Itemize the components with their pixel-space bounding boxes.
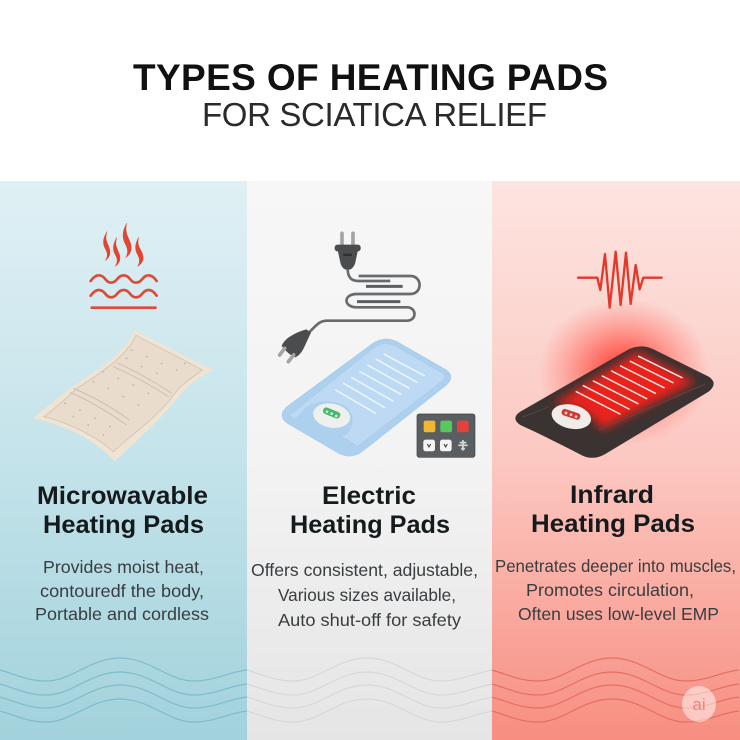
- icon: electric cord and plugs: [280, 233, 420, 362]
- heading: infrared: Heating Pads: [531, 510, 695, 538]
- icon: infrared pad: [515, 346, 714, 458]
- heading: electric: Heating Pads: [290, 511, 450, 539]
- icon: infrared wave: [578, 252, 662, 308]
- text: infrared benefits: [495, 556, 736, 624]
- waves: microwavable: [0, 658, 247, 722]
- icon: infrared glow: [538, 298, 710, 446]
- title: [133, 57, 608, 133]
- panel: electric: [247, 181, 492, 740]
- text: microwavable benefits: Portable and cordless: [35, 604, 209, 624]
- icon: microwavable pad: [33, 330, 214, 462]
- text: microwavable benefits: Provides moist heat,: [43, 557, 204, 577]
- text: infrared benefits: Penetrates deeper into muscles,: [495, 556, 736, 576]
- panel: microwavable: [0, 181, 247, 740]
- title: TYPES OF HEATING PADS: [133, 57, 608, 98]
- text: electric benefits: Offers consistent, adjustable,: [251, 560, 478, 580]
- badge: ai: [682, 686, 716, 722]
- heading: infrared: [531, 481, 695, 538]
- badge: ai: ai: [692, 695, 706, 714]
- heading: microwavable: Microwavable: [37, 482, 208, 510]
- heading: electric: Electric: [322, 482, 416, 510]
- text: electric benefits: Various sizes available,: [278, 585, 456, 605]
- waves: infrared: [492, 658, 739, 722]
- heading: infrared: Infrard: [570, 481, 654, 509]
- text: electric benefits: [251, 560, 478, 630]
- waves: electric: [247, 658, 494, 722]
- text: infrared benefits: Promotes circulation,: [526, 580, 694, 600]
- icon: electric pad: [282, 339, 451, 456]
- heading: microwavable: Heating Pads: [43, 511, 204, 539]
- text: microwavable benefits: contouredf the body,: [40, 581, 204, 601]
- text: electric benefits: Auto shut-off for safety: [278, 610, 461, 630]
- icon: steam and heat waves: [91, 223, 157, 308]
- title: FOR SCIATICA RELIEF: [202, 96, 547, 133]
- text: infrared benefits: Often uses low-level EMP: [518, 604, 719, 624]
- heading: microwavable: [37, 482, 208, 539]
- panel: infrared: [492, 181, 740, 740]
- heading: electric: [290, 482, 450, 539]
- text: microwavable benefits: [35, 557, 209, 624]
- icon: control panel: [417, 414, 475, 457]
